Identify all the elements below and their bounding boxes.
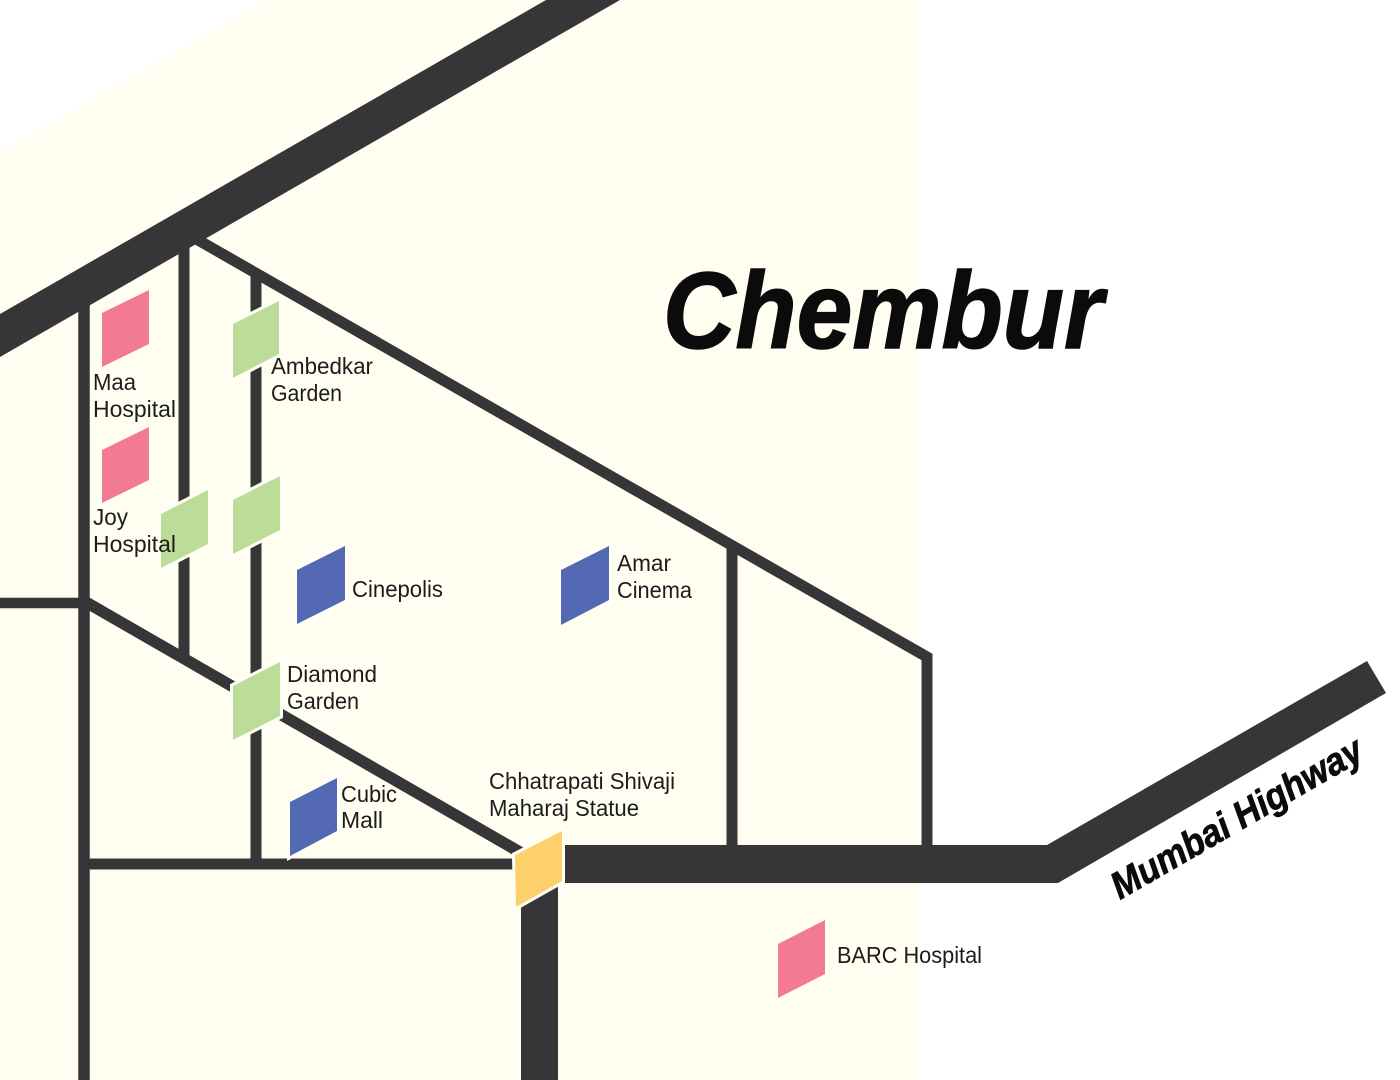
local road: third vertical [250,270,262,862]
marker: Maa Hospital [102,290,149,367]
marker: Ambedkar Garden [233,301,279,378]
marker: Cinepolis [297,546,345,624]
background land area [0,0,919,1080]
label: Amar Cinema: Amar [617,550,671,576]
marker: Amar Cinema [561,546,609,625]
major road: Mumbai Highway [540,661,1386,883]
label: Ambedkar Garden: Ambedkar [271,353,373,379]
label: Maa Hospital: Hospital [93,396,176,422]
marker: Cubic Mall [290,778,337,856]
marker: Joy Hospital [102,427,149,503]
title: Chembur: Chembur [663,250,1108,372]
marker: BARC Hospital [778,920,825,998]
label: Diamond Garden: Garden [287,688,359,714]
label: Cinepolis: Cinepolis [352,576,443,602]
label: Amar Cinema: Cinema [617,577,692,603]
local road: connector vertical [726,545,738,850]
marker: Diamond Garden [233,662,280,740]
label: BARC Hospital: BARC Hospital [837,942,982,968]
label: Cubic Mall: Cubic [341,781,397,807]
marker: garden east [233,476,280,554]
label: Joy Hospital: Hospital [93,531,176,557]
label: Diamond Garden: Diamond [287,661,377,687]
label: Chhatrapati Shivaji Maharaj Statue: Maharaj Statue [489,795,639,821]
major road: north diagonal [0,0,620,357]
major road: south vertical [521,880,558,1080]
label: Ambedkar Garden: Garden [271,380,342,406]
local road: long diagonal [198,240,927,850]
local road: horizontal [84,858,530,870]
marker: garden west [161,490,208,568]
local road: diagonal to statue [84,601,530,858]
marker: Chhatrapati Shivaji Maharaj Statue [515,831,562,907]
local road: west vertical [78,300,90,1080]
label: Joy Hospital: Joy [93,504,128,530]
label: Mumbai Highway: Mumbai Highway [1104,729,1372,908]
label: Maa Hospital: Maa [93,369,136,395]
local road: west spur [0,598,84,608]
local road: second vertical [178,240,190,660]
label: Cubic Mall: Mall [341,807,383,833]
label: Chhatrapati Shivaji Maharaj Statue: Chhatrapati Shivaji [489,768,675,794]
